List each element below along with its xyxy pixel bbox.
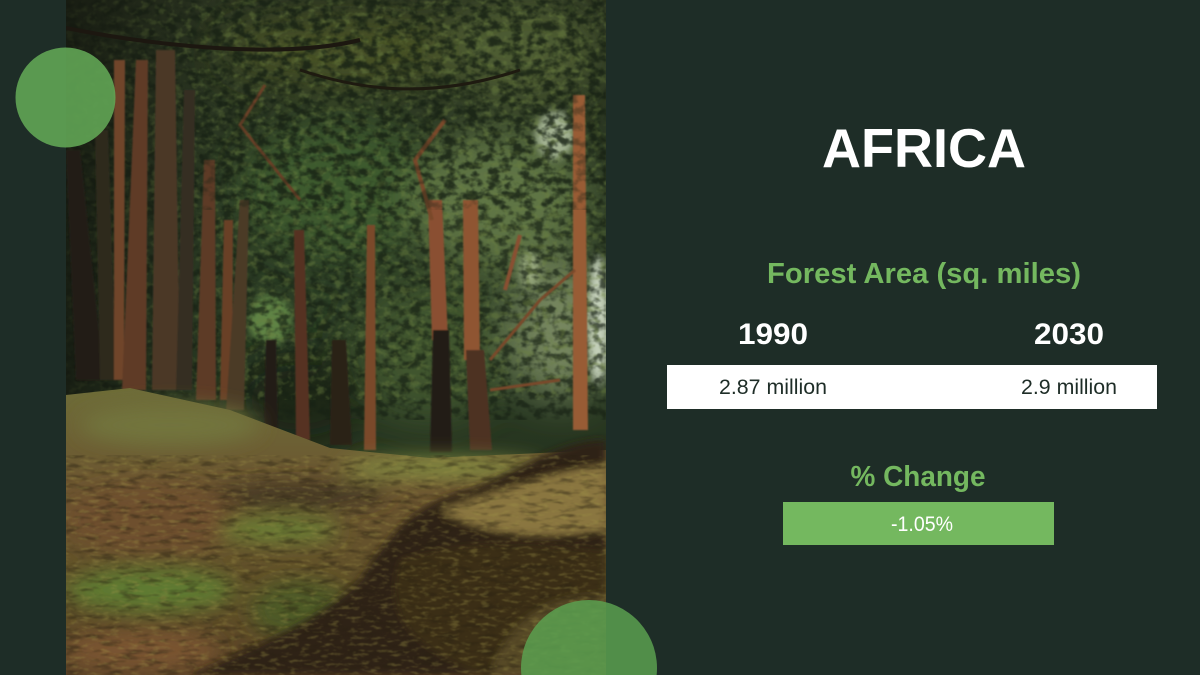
forest photo: [60, 0, 610, 675]
foliage texture: [66, 0, 606, 420]
tree trunks: [66, 50, 588, 452]
values row: 2.9 million: [1021, 376, 1117, 399]
percent change value: [783, 502, 1054, 545]
decorative circle top left: [16, 48, 116, 148]
heading: forest area: Forest Area (sq. miles): [767, 258, 1081, 290]
values row: [667, 365, 1157, 409]
overhead foliage over trunks: [200, 0, 606, 210]
overhead branches: [66, 28, 520, 89]
year 2030: 2030: [1034, 318, 1104, 351]
title: AFRICA: [822, 117, 1026, 179]
grass mound: [190, 440, 606, 675]
heading: percent change: % Change: [850, 461, 986, 493]
values row: 2.87 million: [719, 376, 827, 399]
ground: [66, 388, 606, 675]
percent change value: -1.05%: [891, 513, 953, 536]
decorative circle bottom: [521, 600, 657, 675]
year 1990: 1990: [738, 318, 808, 351]
ground texture: [66, 455, 606, 675]
